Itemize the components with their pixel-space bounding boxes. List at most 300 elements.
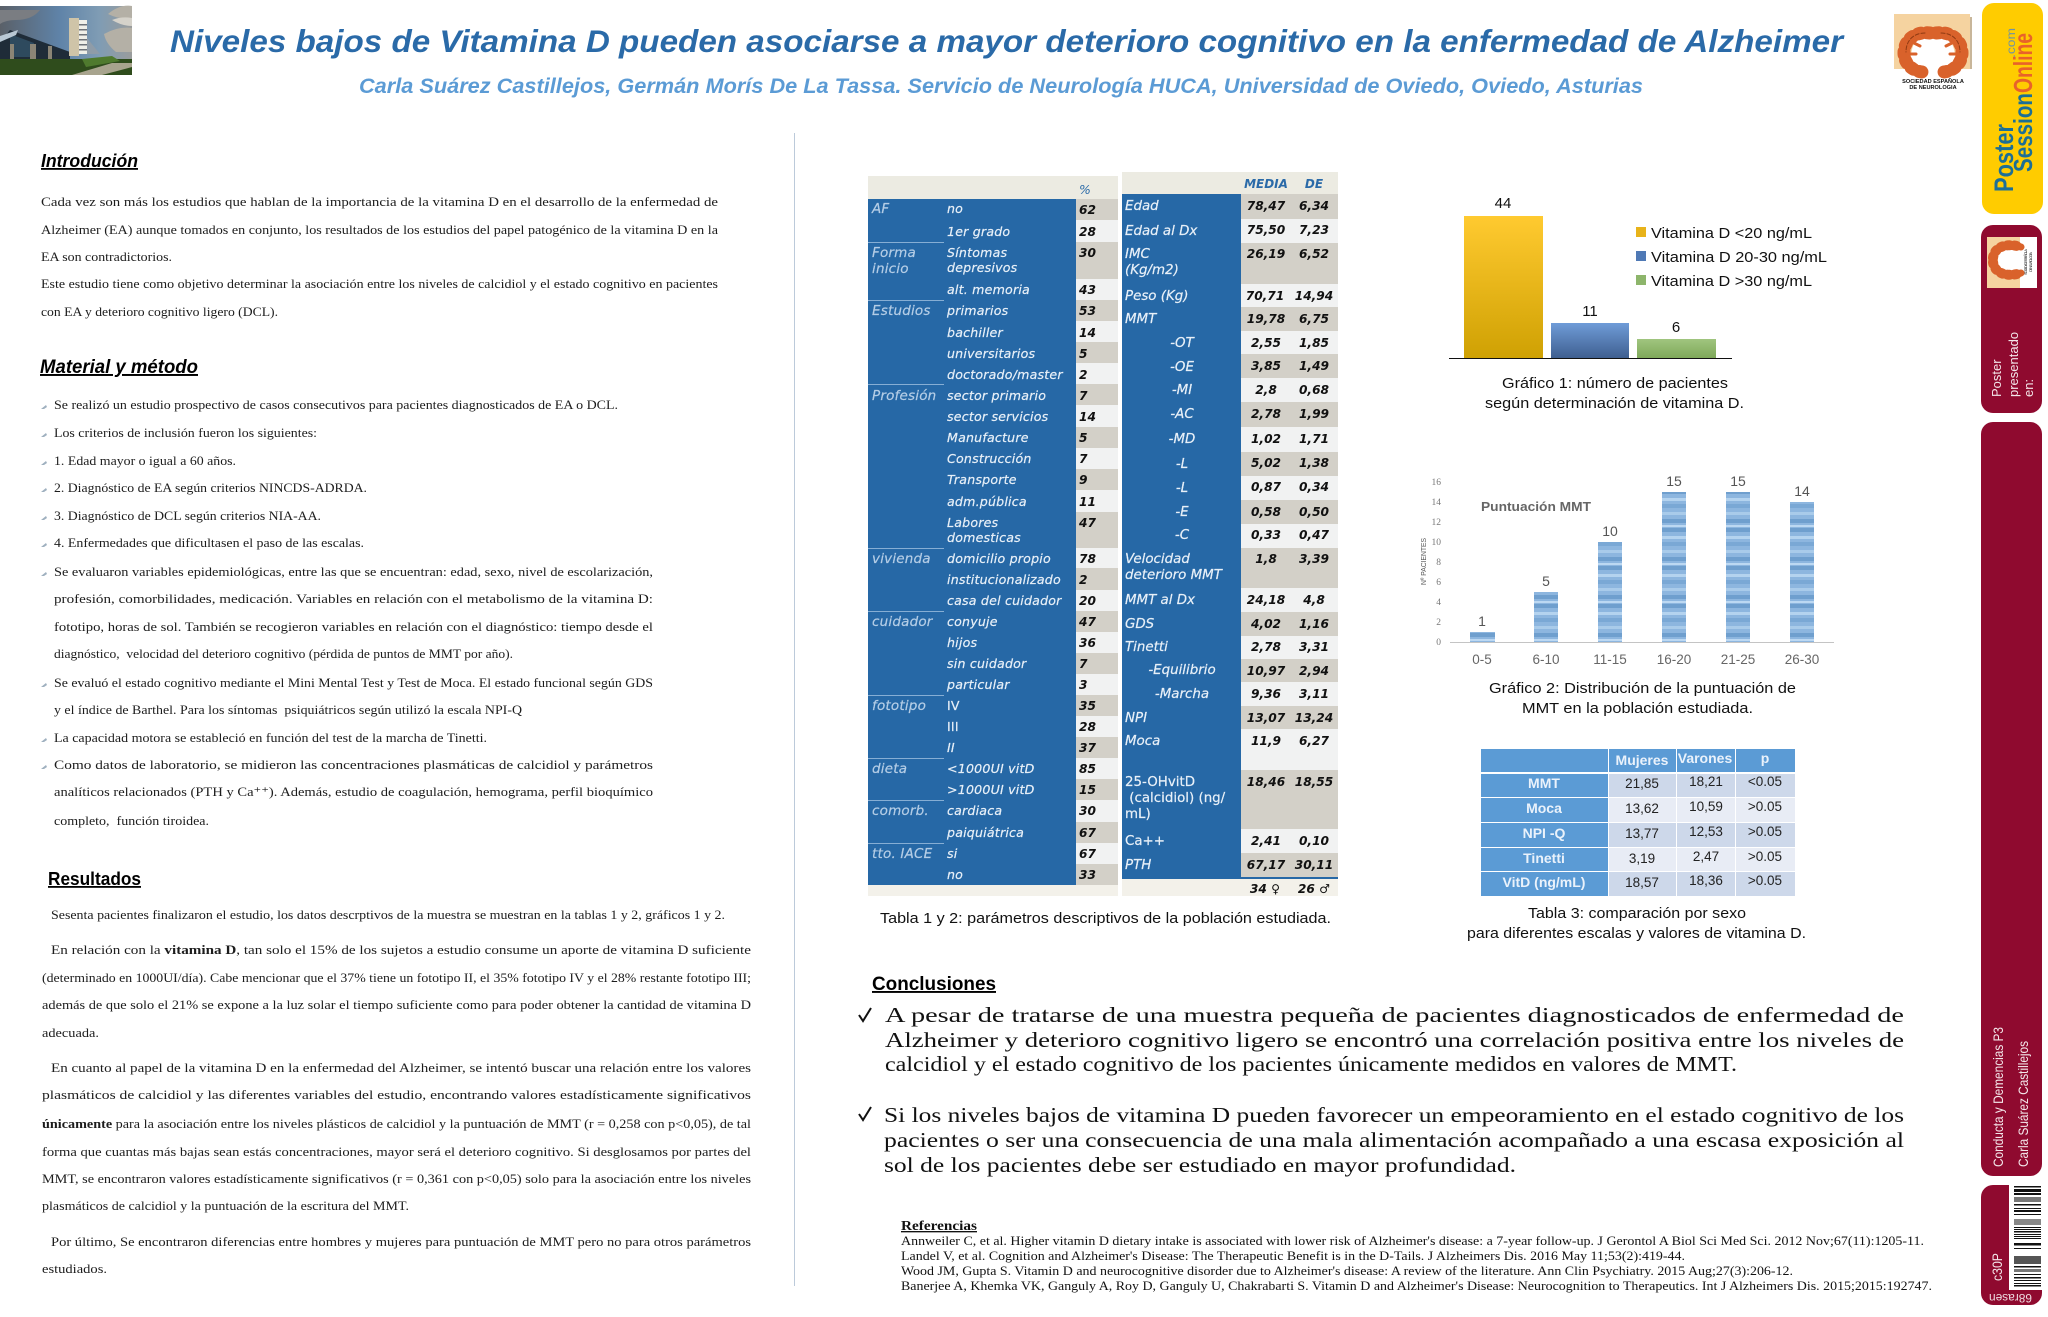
table 2: descriptive numeric parameters: 1,85 (1299, 336, 1329, 350)
text block: material and method: Como datos de laboratorio, se midieron las concentraciones plasmáticas de calcidiol y parámetros (54, 757, 653, 772)
table 1: descriptive categorical parameters: Transporte (947, 472, 1017, 487)
heading: Material y método: Material y método (40, 356, 198, 378)
text block: results: además de que solo el 21% se expone a la luz solar el tiempo suficiente como para poder obtener la cantidad de vitamina D (42, 997, 751, 1012)
table 2: descriptive numeric parameters: -Equilibrio (1148, 663, 1216, 678)
column divider (794, 133, 795, 1286)
table 2: descriptive numeric parameters: 1,99 (1299, 407, 1329, 421)
text block: material and method: fototipo, horas de sol. También se recogieron variables en relación con el diagnóstico: tiempo desde el (54, 619, 653, 634)
sidebar tab: session and author: Conducta y Demencias P3 (1990, 1027, 2006, 1167)
chart 1 legend: Vitamina D <20 ng/mL (1651, 225, 1812, 242)
chart 2: MMT score distribution: Nº PACIENTES (1419, 538, 1428, 585)
table 3: comparison by sex: >0.05 (1748, 824, 1782, 839)
table 1: descriptive categorical parameters: no (947, 867, 963, 882)
conclusion 1: Alzheimer y deterioro cognitivo ligero se encontró una correlación positiva entre los niveles de (885, 1028, 1904, 1052)
table 2: descriptive numeric parameters: 6,75 (1299, 312, 1329, 326)
table 2: descriptive numeric parameters: 3,85 (1251, 359, 1281, 373)
table 2: descriptive numeric parameters: GDS (1125, 617, 1155, 632)
table 1: descriptive categorical parameters: domicilio propio (947, 551, 1051, 566)
table 2: descriptive numeric parameters: 70,71 (1246, 289, 1284, 303)
table 2: descriptive numeric parameters: 26 ♂ (1298, 882, 1330, 896)
conclusion 2: Si los niveles bajos de vitamina D pueden favorecer un empeoramiento en el estado cognitivo de los (884, 1103, 1904, 1127)
table 2: descriptive numeric parameters: 6,52 (1299, 247, 1329, 261)
table 2: descriptive numeric parameters: 1,49 (1299, 359, 1329, 373)
table 3: comparison by sex: VitD (ng/mL) (1503, 874, 1585, 890)
text block: results: MMT, se encontraron valores estadísticamente significativos (r = 0,361 con p<0,05) solo para la asociación entre los niveles (42, 1171, 751, 1186)
text block: results: plasmáticos de calcidiol y las diferentes variables del estudio, encontrando valores estadísticamente significativos (42, 1087, 751, 1102)
table 2: descriptive numeric parameters: 7,23 (1299, 223, 1329, 237)
caption: chart 1 (1485, 375, 1744, 412)
table 2: descriptive numeric parameters: 4,02 (1250, 617, 1281, 631)
table 1: descriptive categorical parameters: 3 (1079, 678, 1087, 692)
table 1: descriptive categorical parameters: adm.pública (947, 494, 1027, 509)
text block: results: adecuada. (42, 1025, 99, 1040)
table 2: descriptive numeric parameters: MMT (1125, 312, 1158, 327)
text block: material and method: 4. Enfermedades que dificultasen el paso de las escalas. (54, 535, 364, 550)
table 2: descriptive numeric parameters: 2,8 (1255, 383, 1277, 397)
text block: material and method: Los criterios de inclusión fueron los siguientes: (54, 425, 317, 440)
caption: chart 1: según determinación de vitamina D. (1485, 395, 1744, 412)
table 1: descriptive categorical parameters: IV (947, 698, 960, 713)
table 2: descriptive numeric parameters: 0,33 (1251, 528, 1281, 542)
table 1: descriptive categorical parameters: 53 (1079, 304, 1096, 318)
table 3: comparison by sex: p (1761, 750, 1769, 766)
table 2: descriptive numeric parameters: 0,87 (1251, 480, 1282, 494)
table 1: descriptive categorical parameters: 33 (1079, 868, 1096, 882)
table 2: descriptive numeric parameters: 0,58 (1251, 505, 1282, 519)
table 1: descriptive categorical parameters: bachiller (947, 325, 1003, 340)
table 3: comparison by sex: 18,36 (1689, 873, 1723, 888)
caption: table 3: para diferentes escalas y valores de vitamina D. (1467, 925, 1806, 942)
caption: tables 1 and 2: Tabla 1 y 2: parámetros descriptivos de la población estudiada. (880, 910, 1331, 927)
table 1: descriptive categorical parameters: primarios (946, 303, 1009, 318)
table 1: descriptive categorical parameters: % (1079, 182, 1091, 197)
table 2: descriptive numeric parameters: -L (1176, 481, 1188, 496)
table 1: descriptive categorical parameters: Construcción (947, 451, 1032, 466)
sidebar tab: PosterSessionOnline: Poster (1989, 124, 2019, 192)
table 1: descriptive categorical parameters: comorb. (872, 803, 929, 819)
table 1: descriptive categorical parameters: hijos (947, 635, 977, 650)
table 2: descriptive numeric parameters: 34 ♀ (1250, 882, 1280, 896)
table 1: descriptive categorical parameters: 1er grado (947, 224, 1010, 239)
text block: material and method: profesión, comorbilidades, medicación. Variables en relación con el metabolismo de la vitamina D: (54, 591, 653, 606)
chart 2: MMT score distribution: Puntuación MMT (1481, 500, 1591, 514)
table 1: descriptive categorical parameters: III (947, 719, 959, 734)
sidebar tab: barcode and code: 68rasen (1989, 1291, 2032, 1303)
text block: introduction: Alzheimer (EA) aunque tomados en conjunto, los resultados de los estudios del papel patogénico de la vitamina D en la (41, 222, 718, 237)
text block: material and method: analíticos relacionados (PTH y Ca⁺⁺). Además, estudio de coagulación, hemograma, perfil bioquímico (54, 784, 653, 799)
table 2: descriptive numeric parameters: -OT (1170, 336, 1196, 351)
text block: results: estudiados. (42, 1261, 107, 1276)
table 2: descriptive numeric parameters: 2,78 (1251, 407, 1282, 421)
table 1: descriptive categorical parameters: Estudios (872, 303, 931, 319)
table 2: descriptive numeric parameters: IMC (1125, 247, 1151, 262)
text block: material and method: La capacidad motora se estableció en función del test de la marcha de Tinetti. (54, 730, 487, 745)
table 2: descriptive numeric parameters: 1,71 (1299, 432, 1329, 446)
heading: Introducción: Introdución (41, 151, 138, 171)
table 2: descriptive numeric parameters: 13,07 (1247, 711, 1286, 725)
references: Wood JM, Gupta S. Vitamin D and neurocognitive disorder due to Alzheimer's disease: A review of the literature. Ann Clin Psychiatry. 2015 Aug;27(3):206-12. (901, 1263, 1793, 1278)
table 2: descriptive numeric parameters: MEDIA (1244, 177, 1288, 191)
chart 1: patients by vitamin D level: 6 (1672, 319, 1680, 336)
table 2: descriptive numeric parameters: 0,47 (1299, 528, 1330, 542)
table 2: descriptive numeric parameters: DE (1305, 177, 1324, 191)
table 1: descriptive categorical parameters: 28 (1079, 720, 1096, 734)
table 2: descriptive numeric parameters: deterioro MMT (1125, 568, 1224, 583)
logo: Sociedad Española de Neurología: SOCIEDAD ESPAÑOLA (1902, 78, 1964, 85)
sidebar tab: poster presented at: SOCIEDAD ESPAÑOLA (2023, 249, 2028, 275)
chart 1: patients by vitamin D level: 11 (1582, 303, 1598, 320)
table 1: descriptive categorical parameters: 43 (1078, 283, 1096, 297)
text block: introduction: Cada vez son más los estudios que hablan de la importancia de la vitamina D en el desarrollo de la enfermedad de (41, 194, 718, 209)
references: Landel V, et al. Cognition and Alzheimer's Disease: The Therapeutic Benefit is in the D-Tails. J Alzheimers Dis. 2016 May 11;53(2):419-44. (901, 1248, 1685, 1263)
sidebar tab: poster presented at: en: (2021, 379, 2036, 397)
table 3: comparison by sex (1481, 749, 1795, 896)
table 1: descriptive categorical parameters: si (947, 846, 958, 861)
text block: introduction: Este estudio tiene como objetivo determinar la asociación entre los niveles de calcidiol y el estado cognitivo en pacientes (41, 276, 718, 291)
table 1: descriptive categorical parameters: 7 (1079, 657, 1088, 671)
table 2: descriptive numeric parameters: NPI (1125, 711, 1147, 726)
table 1: descriptive categorical parameters: Forma (872, 245, 916, 261)
table 2: descriptive numeric parameters: MMT al Dx (1125, 593, 1196, 608)
sidebar tab: PosterSessionOnline: Session (2008, 93, 2038, 172)
table 2: descriptive numeric parameters: 2,78 (1251, 640, 1282, 654)
chart 2: MMT score distribution: 15 (1730, 473, 1746, 489)
table 3: comparison by sex: 21,85 (1625, 776, 1659, 791)
table 1: descriptive categorical parameters: domesticas (947, 530, 1021, 545)
table 1: descriptive categorical parameters: doctorado/master (947, 367, 1063, 382)
caption: chart 1: Gráfico 1: número de pacientes (1502, 375, 1728, 392)
table 1: descriptive categorical parameters: 7 (1079, 452, 1088, 466)
table 2: descriptive numeric parameters: 24,18 (1247, 593, 1286, 607)
table 2: descriptive numeric parameters: 2,41 (1251, 834, 1281, 848)
table 2: descriptive numeric parameters: 10,97 (1247, 664, 1286, 678)
table 2: descriptive numeric parameters: (Kg/m2) (1125, 263, 1179, 278)
chart 2: MMT score distribution: 10 (1432, 538, 1441, 548)
table 2: descriptive numeric parameters: 0,10 (1299, 834, 1330, 848)
table 2: descriptive numeric parameters: 1,16 (1299, 617, 1330, 631)
table 2: descriptive numeric parameters: Ca++ (1125, 834, 1165, 849)
table 2: descriptive numeric parameters: 1,8 (1255, 552, 1277, 566)
chart 2: MMT score distribution: 5 (1542, 573, 1550, 589)
text block: material and method: 1. Edad mayor o igual a 60 años. (54, 453, 236, 468)
table 2: descriptive numeric parameters: 25-OHvitD (1125, 775, 1195, 790)
table 1: descriptive categorical parameters: sector primario (947, 388, 1046, 403)
table 2: descriptive numeric parameters: 1,02 (1251, 432, 1281, 446)
table 1: descriptive categorical parameters: 2 (1079, 573, 1087, 587)
table 2: descriptive numeric parameters: 75,50 (1247, 223, 1286, 237)
sidebar tab: PosterSessionOnline: Online (2008, 33, 2038, 93)
conclusion 1 (859, 1003, 1904, 1076)
text block: results: Sesenta pacientes finalizaron el estudio, los datos descrptivos de la muestra se muestran en la tablas 1 y 2, gráficos 1 y 2. (51, 907, 725, 922)
sidebar tab: poster presented at: DE NEUROLOGIA (2028, 252, 2033, 272)
table 1: descriptive categorical parameters: 47 (1078, 516, 1096, 530)
caption: table 3: Tabla 3: comparación por sexo (1528, 905, 1746, 922)
table 1: descriptive categorical parameters: 5 (1079, 347, 1087, 361)
title: Niveles bajos de Vitamina D pueden asociarse a mayor deterioro cognitivo en la enfermedad de Alzheimer (170, 23, 1845, 59)
chart 2: MMT score distribution: 21-25 (1721, 652, 1755, 667)
table 1: descriptive categorical parameters: Labores (947, 515, 999, 530)
chart 2: MMT score distribution: 8 (1436, 558, 1441, 568)
text block: material and method: Se evaluó el estado cognitivo mediante el Mini Mental Test y Test de Moca. El estado funcional según GDS (54, 675, 653, 690)
table 1: descriptive categorical parameters: 5 (1079, 431, 1087, 445)
caption: chart 2: Gráfico 2: Distribución de la puntuación de (1489, 680, 1796, 697)
sidebar tab: poster presented at (1981, 225, 2042, 413)
table 1: descriptive categorical parameters: 15 (1079, 783, 1096, 797)
chart 2: MMT score distribution: 16 (1432, 478, 1441, 488)
table 1: descriptive categorical parameters: inicio (872, 261, 909, 277)
chart 2: MMT score distribution: 6 (1436, 578, 1441, 588)
table 1: descriptive categorical parameters: 37 (1079, 741, 1096, 755)
table 2: descriptive numeric parameters: -MI (1172, 383, 1192, 398)
text block: introduction: EA son contradictorios. (41, 249, 172, 264)
table 2: descriptive numeric parameters: 26,19 (1247, 247, 1285, 261)
chart 2: MMT score distribution: 6-10 (1532, 652, 1560, 667)
table 3: comparison by sex: NPI -Q (1523, 825, 1565, 841)
table 2: descriptive numeric parameters: 9,36 (1251, 687, 1282, 701)
table 2: descriptive numeric parameters: 11,9 (1251, 734, 1281, 748)
chart 1 legend (1636, 225, 1827, 290)
hospital building photo (0, 6, 132, 75)
table 1: descriptive categorical parameters: fototipo (872, 698, 926, 714)
heading: Conclusiones: Conclusiones (872, 974, 996, 995)
table 2: descriptive numeric parameters: 13,24 (1295, 711, 1333, 725)
table 1: descriptive categorical parameters: 7 (1079, 389, 1088, 403)
logo: Sociedad Española de Neurología: DE NEUROLOGIA (1909, 85, 1957, 91)
table 1: descriptive categorical parameters: 35 (1079, 699, 1096, 713)
table 2: descriptive numeric parameters: Edad (1125, 199, 1159, 214)
table 1: descriptive categorical parameters: conyuje (947, 614, 998, 629)
text block: results: únicamente para la asociación entre los niveles plásticos de calcidiol y la puntuación de MMT (r = 0,258 con p<0,05), de tal (42, 1116, 751, 1131)
conclusion 2 (859, 1103, 1904, 1177)
table 1: descriptive categorical parameters: paiquiátrica (946, 825, 1024, 840)
chart 2: MMT score distribution: 4 (1436, 598, 1441, 608)
table 2: descriptive numeric parameters: 6,34 (1299, 199, 1329, 213)
text block: material and method: diagnóstico, velocidad del deterioro cognitivo (pérdida de puntos de MMT por año). (54, 646, 513, 661)
table 1: descriptive categorical parameters: casa del cuidador (947, 593, 1062, 608)
table 2: descriptive numeric parameters: 14,94 (1295, 289, 1333, 303)
table 2: descriptive numeric parameters: 2,94 (1299, 664, 1329, 678)
table 1: descriptive categorical parameters: AF (871, 201, 889, 217)
text block: material and method: 3. Diagnóstico de DCL según criterios NIA-AA. (54, 508, 321, 523)
table 2: descriptive numeric parameters: 18,46 (1247, 775, 1286, 789)
text block: material and method: Se realizó un estudio prospectivo de casos consecutivos para pacientes diagnosticados de EA o DCL. (54, 397, 618, 412)
table 1: descriptive categorical parameters: <1000UI vitD (947, 761, 1035, 776)
table 1: descriptive categorical parameters: 11 (1079, 495, 1096, 509)
text block: material and method: y el índice de Barthel. Para los síntomas psiquiátricos según utilizó la escala NPI-Q (54, 702, 523, 717)
table 2: descriptive numeric parameters: 1,38 (1299, 456, 1330, 470)
table 1: descriptive categorical parameters: 47 (1078, 615, 1096, 629)
text block: results: Por último, Se encontraron diferencias entre hombres y mujeres para puntuación de MMT pero no para otros parámetros (51, 1234, 751, 1249)
table 3: comparison by sex: >0.05 (1748, 849, 1782, 864)
chart 2: MMT score distribution: 16-20 (1657, 652, 1691, 667)
table 2: descriptive numeric parameters: 5,02 (1251, 456, 1281, 470)
table 2: descriptive numeric parameters: mL) (1125, 807, 1151, 822)
text block: results: plasmáticos de calcidiol y la puntuación de la escritura del MMT. (42, 1198, 409, 1213)
table 1: descriptive categorical parameters: 78 (1079, 552, 1096, 566)
table 1: descriptive categorical parameters: 2 (1079, 368, 1087, 382)
table 1: descriptive categorical parameters: 30 (1079, 804, 1096, 818)
table 2: descriptive numeric parameters: -E (1175, 505, 1189, 520)
table 1: descriptive categorical parameters: tto. IACE (872, 846, 933, 862)
table 1: descriptive categorical parameters: vivienda (872, 551, 931, 567)
table 2: descriptive numeric parameters: PTH (1125, 858, 1151, 873)
table 2: descriptive numeric parameters (1122, 172, 1338, 896)
references: Annweiler C, et al. Higher vitamin D dietary intake is associated with lower risk of Alzheimer's disease: a 7-year follow-up. J Gerontol A Biol Sci Med Sci. 2012 Nov;67(11):1205-11. (901, 1233, 1924, 1248)
text block: results: (determinado en 1000UI/día). Cabe mencionar que el 37% tiene un fototipo II, el 35% fototipo IV y el 28% restante fototipo III; (42, 970, 751, 985)
sidebar tab: PosterSessionOnline (1982, 3, 2043, 214)
sidebar tab: barcode and code (1981, 1185, 2042, 1305)
table 3: comparison by sex: MMT (1528, 775, 1560, 791)
conclusion 1: A pesar de tratarse de una muestra pequeña de pacientes diagnosticados de enfermedad de (885, 1003, 1904, 1027)
table 3: comparison by sex: >0.05 (1748, 799, 1782, 814)
table 1: descriptive categorical parameters: dieta (872, 761, 907, 777)
table 1: descriptive categorical parameters: 62 (1079, 203, 1096, 217)
table 1: descriptive categorical parameters: 28 (1079, 225, 1096, 239)
table 1: descriptive categorical parameters: sector servicios (947, 409, 1049, 424)
table 3: comparison by sex: >0.05 (1748, 873, 1782, 888)
table 1: descriptive categorical parameters: 67 (1079, 826, 1096, 840)
text block: results: forma que cuantas más bajas sean estás concentraciones, mayor será el deterioro cognitivo. Si desglosamos por partes del (42, 1144, 751, 1159)
chart 2: MMT score distribution: 12 (1432, 518, 1441, 528)
chart 2: MMT score distribution: 2 (1436, 618, 1441, 628)
table 1: descriptive categorical parameters: cardiaca (947, 803, 1002, 818)
conclusion 2: pacientes o ser una consecuencia de una mala alimentación acompañado a una escasa exposición al (884, 1128, 1904, 1152)
table 1: descriptive categorical parameters: 85 (1079, 762, 1096, 776)
table 2: descriptive numeric parameters: -OE (1170, 360, 1194, 375)
chart 2: MMT score distribution: 0 (1436, 638, 1441, 648)
chart 1 legend: Vitamina D >30 ng/mL (1651, 273, 1812, 290)
table 2: descriptive numeric parameters: -L (1176, 457, 1188, 472)
table 2: descriptive numeric parameters: Moca (1125, 734, 1160, 749)
table 3: comparison by sex: Varones (1678, 750, 1732, 766)
chart 2: MMT score distribution: 14 (1432, 498, 1441, 508)
table 1: descriptive categorical parameters: 20 (1079, 594, 1096, 608)
table 2: descriptive numeric parameters: (calcidiol) (ng/ (1125, 791, 1226, 806)
chart 2: MMT score distribution: 15 (1666, 473, 1682, 489)
table 1: descriptive categorical parameters: Síntomas (947, 245, 1008, 260)
chart 2: MMT score distribution: 1 (1478, 613, 1486, 629)
caption: chart 2: MMT en la población estudiada. (1522, 700, 1753, 717)
table 2: descriptive numeric parameters: Edad al Dx (1125, 224, 1198, 239)
caption: table 3 (1467, 905, 1806, 942)
sidebar tab: barcode and code: c30P (1989, 1253, 2005, 1281)
sidebar tab: session and author (1981, 422, 2042, 1176)
table 3: comparison by sex: 18,21 (1689, 774, 1723, 789)
table 2: descriptive numeric parameters: 3,11 (1299, 687, 1329, 701)
text block: introduction (41, 194, 718, 319)
references (901, 1218, 1932, 1293)
sidebar tab: poster presented at: Poster (1989, 359, 2004, 397)
text block: results (42, 907, 751, 1276)
table 2: descriptive numeric parameters: 67,17 (1247, 858, 1286, 872)
caption: chart 2 (1489, 680, 1796, 717)
table 3: comparison by sex: 18,57 (1625, 875, 1659, 890)
table 1: descriptive categorical parameters: 36 (1079, 636, 1096, 650)
table 2: descriptive numeric parameters: 0,50 (1299, 505, 1330, 519)
table 1: descriptive categorical parameters: 14 (1079, 410, 1096, 424)
table 1: descriptive categorical parameters: II (947, 740, 955, 755)
table 2: descriptive numeric parameters: 19,78 (1247, 312, 1286, 326)
table 3: comparison by sex: 12,53 (1689, 824, 1723, 839)
table 2: descriptive numeric parameters: Tinetti (1125, 640, 1168, 655)
text block: material and method: 2. Diagnóstico de EA según criterios NINCDS-ADRDA. (54, 480, 367, 495)
table 2: descriptive numeric parameters: Velocidad (1125, 552, 1190, 567)
table 3: comparison by sex: 3,19 (1629, 851, 1655, 866)
table 1: descriptive categorical parameters (868, 176, 1118, 896)
table 2: descriptive numeric parameters: 30,11 (1295, 858, 1333, 872)
chart 1: patients by vitamin D level (1449, 195, 1827, 359)
chart 2: MMT score distribution: 10 (1602, 523, 1618, 539)
table 2: descriptive numeric parameters: -C (1175, 528, 1190, 543)
table 1: descriptive categorical parameters: 67 (1079, 847, 1096, 861)
conclusion 1: calcidiol y el estado cognitivo de los pacientes únicamente medidos en valores de MMT. (885, 1052, 1737, 1076)
table 2: descriptive numeric parameters: Peso (Kg) (1125, 289, 1188, 304)
table 2: descriptive numeric parameters: 6,27 (1299, 734, 1330, 748)
chart 2: MMT score distribution: 14 (1794, 483, 1810, 499)
table 1: descriptive categorical parameters: institucionalizado (947, 572, 1061, 587)
references: Referencias (901, 1218, 977, 1233)
table 1: descriptive categorical parameters: universitarios (947, 346, 1036, 361)
table 2: descriptive numeric parameters: 3,31 (1299, 640, 1329, 654)
heading: Resultados: Resultados (48, 869, 141, 889)
text block: material and method (41, 397, 653, 828)
table 2: descriptive numeric parameters: -Marcha (1155, 687, 1209, 702)
text block: results: En cuanto al papel de la vitamina D en la enfermedad del Alzheimer, se intentó buscar una relación entre los valores (51, 1060, 751, 1075)
table 1: descriptive categorical parameters: 30 (1079, 246, 1096, 260)
table 3: comparison by sex: 10,59 (1689, 799, 1723, 814)
sidebar tab: PosterSessionOnline: .com (2004, 28, 2018, 58)
logo: Sociedad Española de Neurología (1890, 14, 1976, 93)
table 1: descriptive categorical parameters: 9 (1079, 473, 1087, 487)
sidebar tab: session and author: Carla Suárez Castillejos (2015, 1041, 2031, 1167)
table 1: descriptive categorical parameters: Profesión (872, 388, 936, 404)
chart 1: patients by vitamin D level: 44 (1495, 195, 1511, 212)
table 1: descriptive categorical parameters: Manufacture (947, 430, 1029, 445)
table 1: descriptive categorical parameters: sin cuidador (947, 656, 1027, 671)
text block: material and method: Se evaluaron variables epidemiológicas, entre las que se encuentran: edad, sexo, nivel de escolarización, (54, 564, 653, 579)
table 3: comparison by sex: 13,62 (1625, 801, 1659, 816)
table 2: descriptive numeric parameters: 0,34 (1299, 480, 1329, 494)
chart 1 legend: Vitamina D 20-30 ng/mL (1651, 249, 1827, 266)
table 1: descriptive categorical parameters: no (947, 201, 963, 216)
table 3: comparison by sex: Mujeres (1616, 752, 1669, 768)
table 2: descriptive numeric parameters: -AC (1170, 407, 1194, 422)
chart 2: MMT score distribution: 0-5 (1472, 652, 1492, 667)
table 1: descriptive categorical parameters: alt. memoria (947, 282, 1030, 297)
table 2: descriptive numeric parameters: 3,39 (1299, 552, 1329, 566)
table 1: descriptive categorical parameters: cuidador (872, 614, 934, 630)
table 1: descriptive categorical parameters: particular (946, 677, 1010, 692)
sidebar tab: poster presented at: presentado (2006, 332, 2021, 397)
table 2: descriptive numeric parameters: 18,55 (1295, 775, 1333, 789)
table 1: descriptive categorical parameters: depresivos (947, 260, 1018, 275)
table 2: descriptive numeric parameters: 2,55 (1251, 336, 1281, 350)
table 3: comparison by sex: <0.05 (1748, 774, 1782, 789)
chart 2: MMT score distribution: 26-30 (1785, 652, 1819, 667)
authors subtitle: Carla Suárez Castillejos, Germán Morís De La Tassa. Servicio de Neurología HUCA, Universidad de Oviedo, Oviedo, Asturias (359, 75, 1643, 98)
references: Banerjee A, Khemka VK, Ganguly A, Roy D, Ganguly U, Chakrabarti S. Vitamin D and Alzheimer's Disease: Neurocognition to Therapeutics. Int J Alzheimers Dis. 2015;2015:192747. (901, 1278, 1932, 1293)
table 3: comparison by sex: 2,47 (1693, 849, 1719, 864)
table 3: comparison by sex: Tinetti (1523, 850, 1565, 866)
table 3: comparison by sex: 13,77 (1625, 826, 1659, 841)
conclusion 2: sol de los pacientes debe ser estudiado en mayor profundidad. (884, 1153, 1516, 1177)
text block: introduction: con EA y deterioro cognitivo ligero (DCL). (41, 304, 278, 319)
table 2: descriptive numeric parameters: 0,68 (1299, 383, 1330, 397)
chart 2: MMT score distribution (1419, 473, 1834, 667)
table 3: comparison by sex: Moca (1526, 800, 1562, 816)
table 1: descriptive categorical parameters: >1000UI vitD (947, 782, 1035, 797)
chart 2: MMT score distribution: 11-15 (1593, 652, 1627, 667)
